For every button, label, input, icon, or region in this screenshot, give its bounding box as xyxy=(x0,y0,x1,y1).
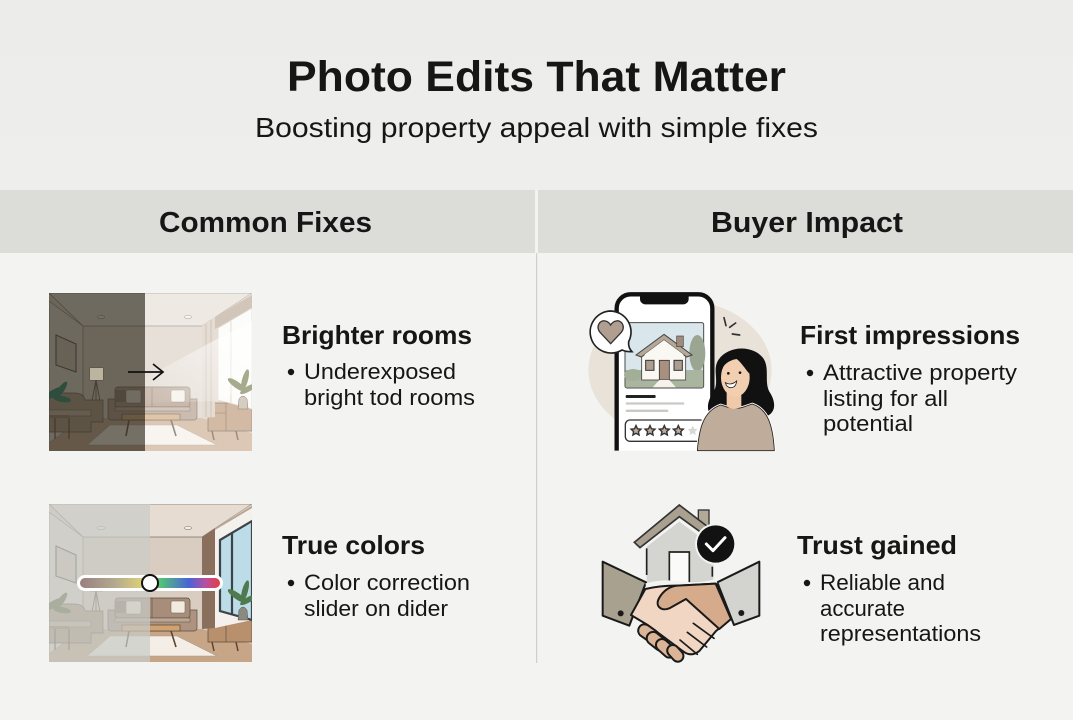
column header: buyer impact: Buyer Impact xyxy=(711,207,903,239)
text: true colors: Color correction xyxy=(304,570,470,595)
text: first impressions: listing for all xyxy=(823,386,948,411)
text: brighter rooms xyxy=(282,320,475,410)
right cuff xyxy=(717,562,759,625)
text: brighter rooms: bright tod rooms xyxy=(304,385,475,410)
text: true colors: slider on dider xyxy=(304,596,448,621)
hands xyxy=(631,581,731,664)
text: brighter rooms: Brighter rooms xyxy=(282,320,472,350)
icon: check badge xyxy=(695,523,736,565)
house xyxy=(634,505,725,585)
text: brighter rooms: Underexposed xyxy=(304,359,456,384)
text: trust gained xyxy=(797,530,981,646)
text: true colors: True colors xyxy=(282,530,425,560)
text: trust gained: representations xyxy=(820,621,981,646)
text: first impressions: Attractive property xyxy=(823,360,1017,385)
text: true colors xyxy=(282,530,470,621)
color slider xyxy=(77,575,223,591)
left cuff xyxy=(603,562,646,626)
icon: heart speech bubble xyxy=(590,311,632,353)
panel: brighter rooms photo xyxy=(43,293,257,451)
icon: handshake and house xyxy=(603,505,759,664)
column header: common fixes xyxy=(0,190,535,253)
subtitle: Boosting property appeal with simple fixes xyxy=(255,112,818,143)
header band xyxy=(0,0,1073,190)
title: Photo Edits That Matter xyxy=(287,53,786,101)
woman xyxy=(697,349,774,451)
text: first impressions: potential xyxy=(823,411,913,436)
text: trust gained: Reliable and xyxy=(820,570,945,595)
column header: common fixes: Common Fixes xyxy=(159,207,372,239)
panel: true colors photo xyxy=(43,504,257,662)
icon: sparkle marks xyxy=(724,318,740,335)
backdrop circle xyxy=(588,300,772,440)
phone xyxy=(617,294,712,451)
text: trust gained: accurate xyxy=(820,596,905,621)
icon: phone listing with woman xyxy=(588,294,774,451)
column header: buyer impact xyxy=(538,190,1073,253)
icon: arrow xyxy=(128,364,163,380)
text: first impressions xyxy=(800,320,1020,436)
text: first impressions: First impressions xyxy=(800,320,1020,350)
text: trust gained: Trust gained xyxy=(797,530,957,560)
